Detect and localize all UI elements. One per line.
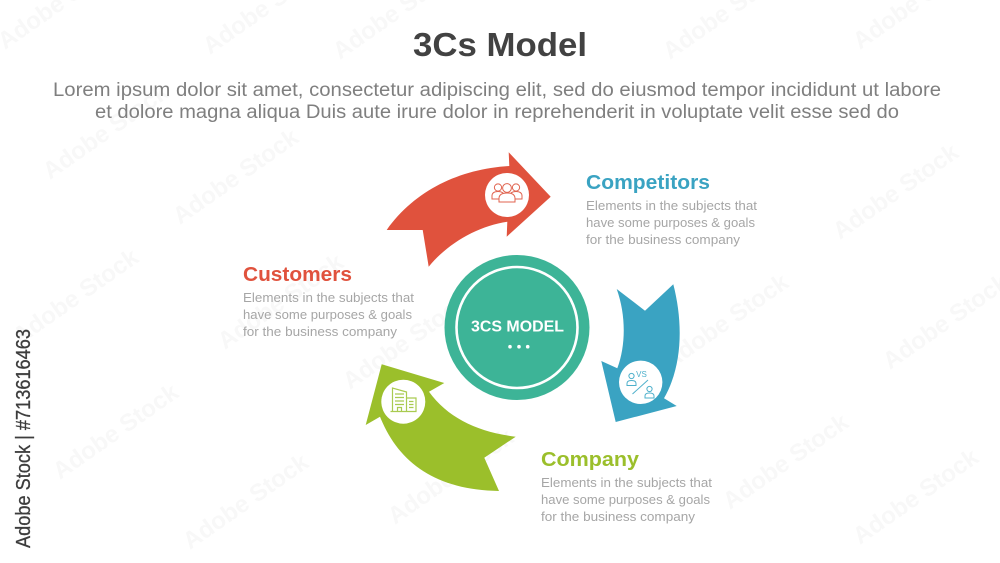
intro paragraph bbox=[53, 80, 941, 123]
title: 3Cs Model bbox=[413, 26, 587, 63]
text block: Competitors: have some purposes & goals bbox=[586, 215, 756, 230]
icon: office buildings bbox=[381, 380, 425, 424]
center circle: 3Cs Model bbox=[444, 255, 590, 400]
center circle: 3Cs Model: 3CS MODEL bbox=[471, 318, 564, 336]
text block: Customers bbox=[243, 264, 414, 339]
text block: Company: Company bbox=[541, 449, 640, 471]
arrow: customers to competitors (red) bbox=[387, 152, 551, 267]
text block: Customers: Elements in the subjects that bbox=[243, 290, 414, 305]
text block: Company: for the business company bbox=[541, 509, 696, 524]
intro paragraph: Lorem ipsum dolor sit amet, consectetur adipiscing elit, sed do eiusmod tempor incididunt ut labore bbox=[53, 80, 941, 101]
text: Adobe Stock bbox=[718, 408, 854, 515]
text: Adobe Stock bbox=[48, 378, 184, 485]
text block: Competitors: Elements in the subjects that bbox=[586, 198, 757, 213]
text: Adobe Stock bbox=[658, 268, 794, 375]
text: Adobe Stock bbox=[338, 288, 474, 395]
text: Adobe Stock bbox=[8, 243, 144, 350]
text: Adobe Stock bbox=[848, 443, 984, 550]
text block: Competitors: Competitors bbox=[586, 172, 710, 194]
intro paragraph: et dolore magna aliqua Duis aute irure dolor in reprehenderit in voluptate velit esse sed do bbox=[95, 102, 899, 123]
icon: person versus person: VS bbox=[636, 370, 647, 379]
text block: Company bbox=[541, 449, 712, 524]
stock credit: Adobe Stock | #713616463 bbox=[13, 329, 35, 548]
arrow: company to customers (green) bbox=[366, 364, 516, 491]
arrow: competitors to company (blue) bbox=[601, 284, 680, 422]
text block: Customers: for the business company bbox=[243, 324, 398, 339]
text: Adobe Stock bbox=[213, 248, 349, 355]
text block: Company: Elements in the subjects that bbox=[541, 475, 712, 490]
text: Adobe Stock bbox=[178, 448, 314, 555]
text: Adobe Stock bbox=[168, 123, 304, 230]
text: Adobe Stock bbox=[38, 78, 174, 185]
text block: Customers: Customers bbox=[243, 264, 352, 286]
text block: Competitors: for the business company bbox=[586, 232, 741, 247]
text block: Company: have some purposes & goals bbox=[541, 492, 711, 507]
icon: people group bbox=[485, 173, 529, 217]
text: Adobe Stock bbox=[828, 138, 964, 245]
text block: Customers: have some purposes & goals bbox=[243, 307, 413, 322]
text block: Competitors bbox=[586, 172, 757, 247]
text: Adobe Stock bbox=[383, 423, 519, 530]
